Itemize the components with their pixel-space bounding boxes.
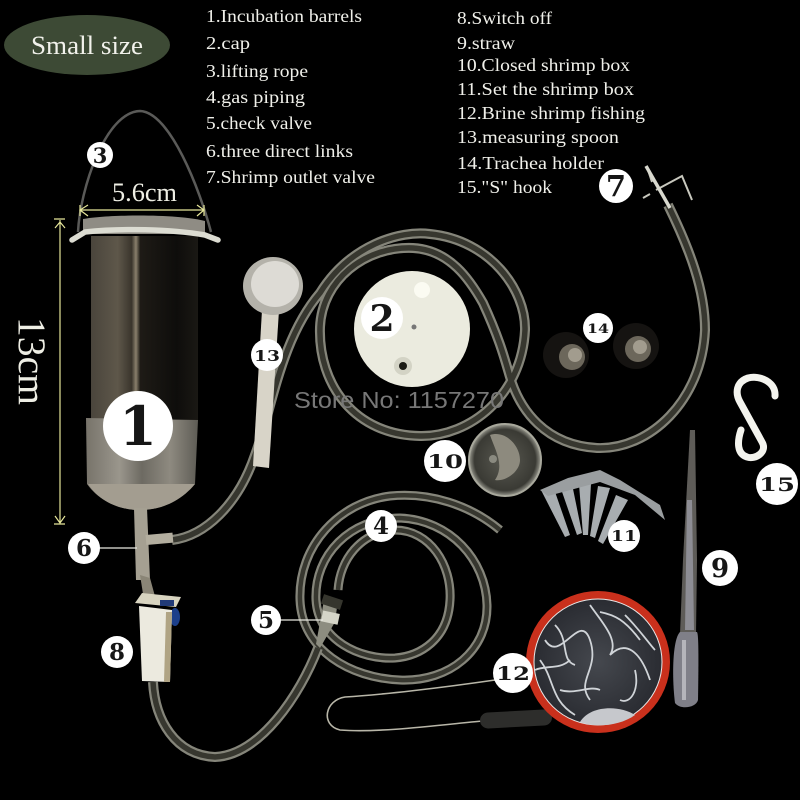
badge 6: 6: [76, 535, 92, 562]
long air tube with outlet valve: [172, 166, 705, 540]
parts list: items 1 to 7: 6.three direct links: [206, 141, 353, 161]
parts list: items 8 to 15: 11.Set the shrimp box: [457, 79, 634, 99]
barrel upper dark section: [91, 236, 198, 420]
badge 9: 9: [711, 554, 729, 584]
badge 11: 11: [611, 527, 637, 545]
parts list: items 8 to 15: 12.Brine shrimp fishing: [457, 103, 645, 123]
badge 3: 3: [93, 143, 107, 168]
S hook: [737, 377, 775, 458]
parts list: items 8 to 15: [457, 8, 645, 197]
lower tube from clamp to check valve: [153, 648, 318, 757]
size badge: small size: Small size: [31, 31, 143, 60]
shrimp tube set: [540, 470, 665, 544]
badge 12: [493, 653, 533, 693]
badge 14: 14: [587, 322, 609, 337]
measuring spoon: [243, 257, 303, 468]
height dimension: 13cm: 13cm: [10, 317, 53, 405]
parts list: items 1 to 7: 3.lifting rope: [206, 61, 308, 81]
badge 3: [87, 142, 113, 168]
parts list: items 8 to 15: 8.Switch off: [457, 8, 552, 28]
leader line: 5 to valve: [279, 619, 323, 621]
brine shrimp net: [327, 591, 670, 733]
trachea holders: [543, 323, 659, 378]
badge 13: [251, 339, 283, 371]
badge 13: 13: [254, 347, 280, 365]
badge 14: [583, 313, 613, 343]
badge 2: [361, 297, 403, 340]
barrel cap disc: [354, 271, 470, 387]
parts list: items 1 to 7: 4.gas piping: [206, 87, 305, 107]
gas piping coil: [300, 495, 500, 680]
badge 15: [756, 463, 798, 505]
barrel lower clear section: [86, 418, 198, 510]
badge 4: 4: [373, 513, 389, 540]
badge 15: 15: [759, 474, 795, 496]
pipette straw: [673, 430, 698, 707]
barrel cap rim: [83, 215, 205, 234]
three-way connector: [134, 508, 173, 600]
parts list: items 1 to 7: [206, 6, 375, 187]
badge 1: [103, 391, 173, 461]
badge 9: [702, 550, 738, 586]
badge 8: [101, 636, 133, 668]
badge 1: 1: [119, 394, 157, 458]
parts list: items 8 to 15: 9.straw: [457, 33, 515, 53]
net handle grip: [480, 709, 552, 729]
incubation barrel: [72, 111, 218, 510]
badge 2: 2: [369, 298, 395, 340]
watermark: store number: Store No: 1157270: [294, 387, 504, 413]
parts list: items 8 to 15: 15."S" hook: [457, 177, 552, 197]
badge 12: 12: [496, 663, 530, 685]
width dimension: 5.6cm: 5.6cm: [112, 178, 177, 207]
badge 11: [608, 520, 640, 552]
leader line: 6 to connector: [98, 547, 137, 549]
parts list: items 1 to 7: 5.check valve: [206, 113, 312, 133]
badge 5: [251, 605, 281, 635]
parts list: items 1 to 7: 2.cap: [206, 33, 250, 53]
parts list: items 1 to 7: 7.Shrimp outlet valve: [206, 167, 375, 187]
check valve: [316, 594, 343, 648]
size badge: small size: [4, 15, 170, 75]
badge 4: [365, 510, 397, 542]
height dimension: 13cm: [10, 219, 65, 524]
badge 8: 8: [109, 639, 125, 666]
badge 6: [68, 532, 100, 564]
net handle wire: [327, 680, 495, 731]
badge 10: 10: [427, 451, 463, 473]
width dimension: 5.6cm: [80, 178, 204, 216]
badge 5: 5: [258, 607, 274, 634]
parts list: items 1 to 7: 1.Incubation barrels: [206, 6, 362, 26]
parts list: items 8 to 15: 13.measuring spoon: [457, 127, 619, 147]
badge 7: [599, 169, 633, 203]
shut-off clamp: [135, 593, 181, 682]
badge 7: 7: [606, 169, 626, 203]
parts list: items 8 to 15: 14.Trachea holder: [457, 153, 604, 173]
parts list: items 8 to 15: 10.Closed shrimp box: [457, 55, 630, 75]
lifting rope: [78, 111, 211, 232]
closed shrimp box: [469, 424, 541, 496]
badge 10: [424, 440, 466, 482]
